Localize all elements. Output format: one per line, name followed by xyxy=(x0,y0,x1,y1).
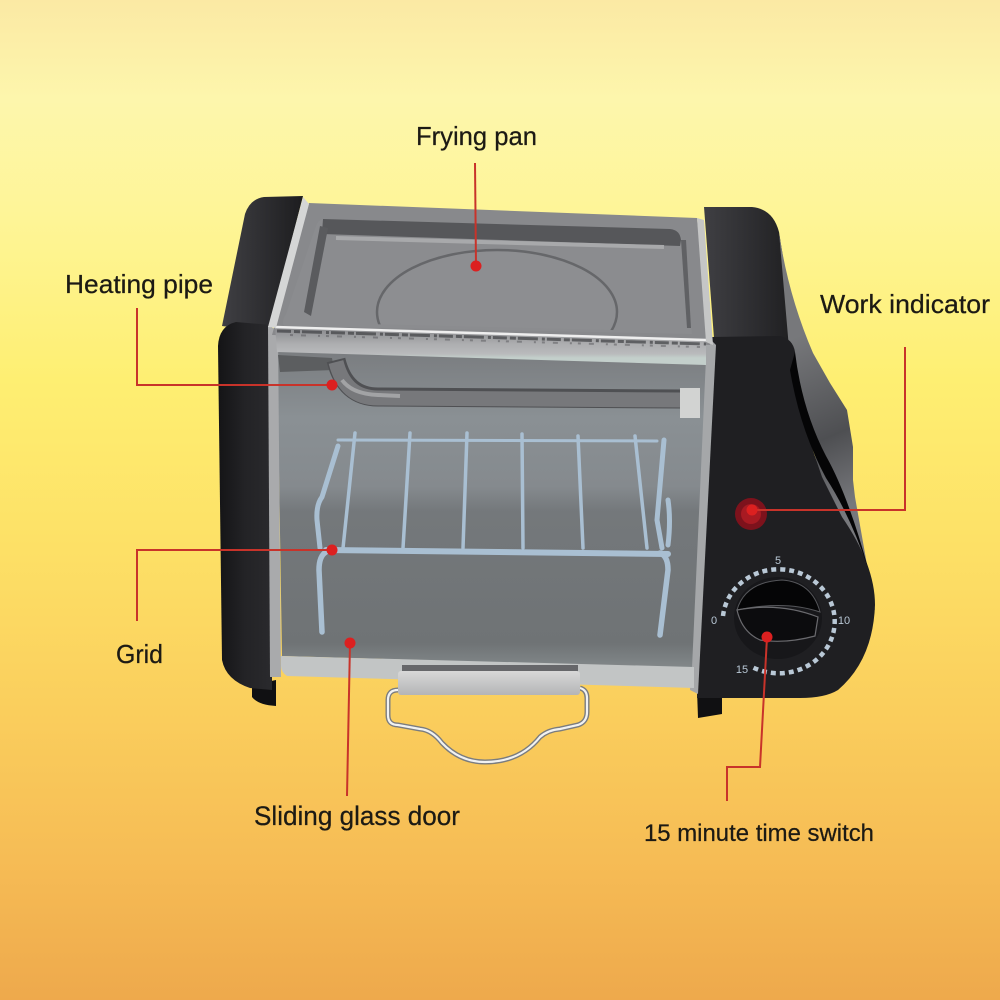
oven illustration xyxy=(218,196,875,762)
heating pipe xyxy=(278,355,700,418)
silver strip right xyxy=(690,335,716,694)
label: 15 minute time switch: 15 minute time switch xyxy=(644,820,874,847)
knob xyxy=(734,577,822,659)
right side handle and gloss xyxy=(779,232,875,610)
leader line: frying pan xyxy=(470,163,482,272)
timer dial: 15 xyxy=(736,664,748,676)
frying pan tray xyxy=(272,203,710,345)
right foot xyxy=(697,690,722,718)
front silver bar xyxy=(275,326,706,365)
timer dial xyxy=(711,555,850,676)
leader line: work indicator xyxy=(746,347,905,516)
glass interior xyxy=(277,348,706,668)
pipe end cap xyxy=(680,388,700,418)
right side top panel xyxy=(704,207,797,345)
silver trim left xyxy=(268,197,309,328)
label: frying pan: Frying pan xyxy=(416,121,537,151)
right control panel xyxy=(697,336,875,698)
door lower bar xyxy=(281,656,694,688)
label: work indicator: Work indicator xyxy=(820,289,990,319)
leader line: grid xyxy=(137,544,338,621)
dial numbers: 5 xyxy=(775,555,781,567)
circular recess xyxy=(376,248,618,330)
pan upper shadow band xyxy=(322,219,681,246)
label: sliding glass door: Sliding glass door xyxy=(254,801,460,831)
label: heating pipe: Heating pipe xyxy=(65,269,213,299)
timer dial: 10 xyxy=(838,615,850,627)
leader line: sliding glass door xyxy=(344,638,356,796)
timer dial: 0 xyxy=(711,615,717,627)
power indicator lamp xyxy=(735,498,767,530)
label: grid: Grid xyxy=(116,639,163,669)
silver strip left xyxy=(268,326,281,677)
leader line: time switch xyxy=(727,632,772,801)
wire grid rack xyxy=(317,433,670,635)
leader line: heating pipe xyxy=(137,308,338,390)
left foot xyxy=(252,680,276,706)
left side front panel xyxy=(218,322,272,690)
silver trim right xyxy=(697,218,713,345)
side gloss highlight xyxy=(790,352,868,568)
door handle xyxy=(388,665,587,762)
left side top panel xyxy=(222,196,303,332)
